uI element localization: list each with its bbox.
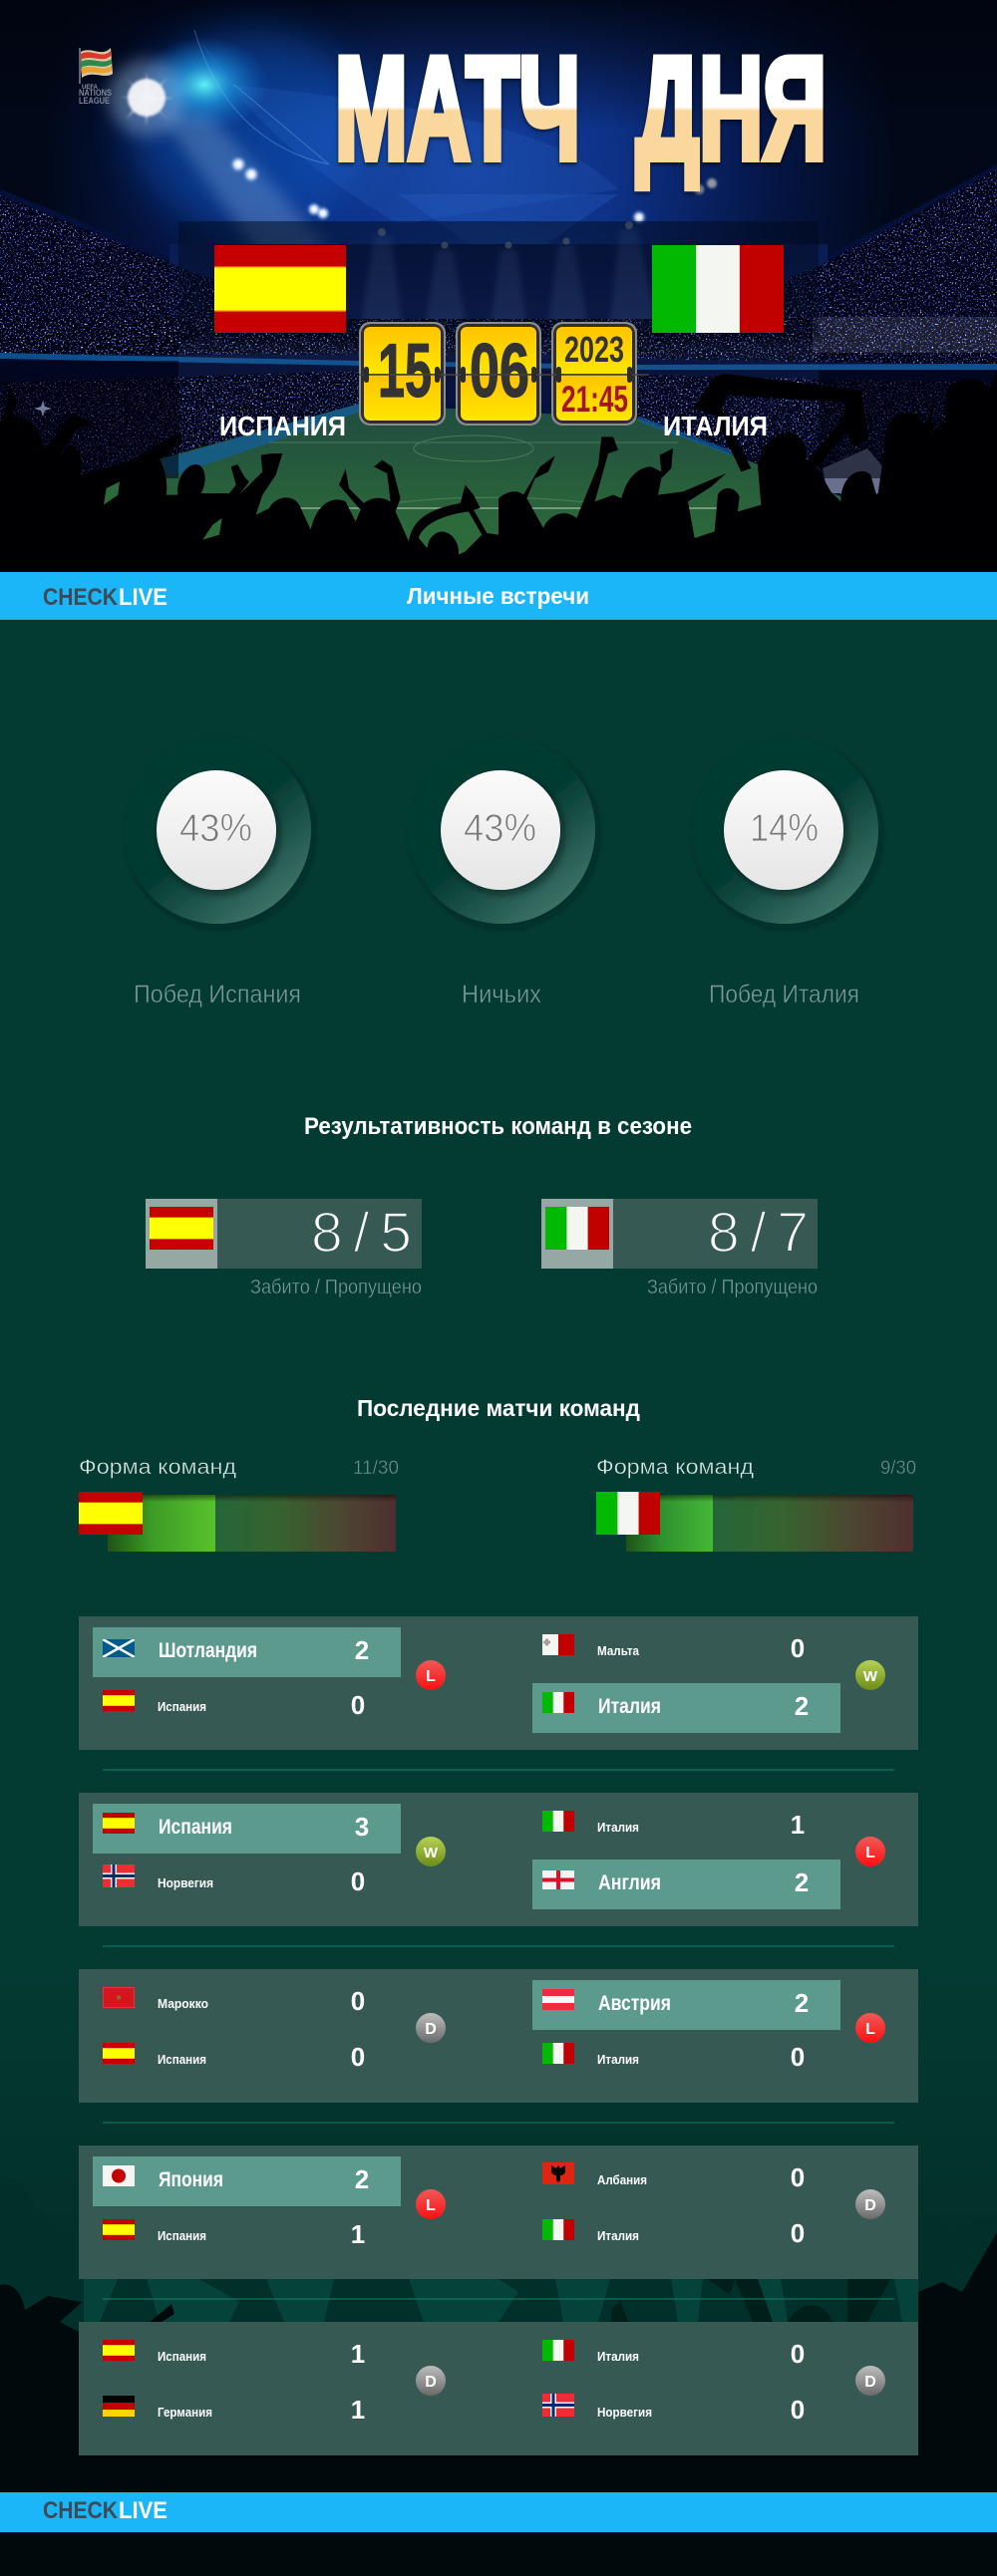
flip clock: date and time bbox=[359, 322, 649, 426]
badge: L: L bbox=[426, 2197, 436, 2214]
badge: D bbox=[855, 2189, 885, 2219]
Германия 1: 1 bbox=[351, 2395, 365, 2425]
team form: Испания bbox=[79, 1456, 399, 1552]
goals card: Италия bbox=[541, 1199, 818, 1298]
card: month bbox=[456, 322, 541, 426]
Италия 2: Италия bbox=[598, 1695, 661, 1718]
heading: Последние матчи команд: Последние матчи команд bbox=[357, 1395, 640, 1421]
Испания 0 bbox=[103, 1690, 365, 1720]
hero translucent match panel bbox=[178, 221, 819, 478]
crowd silhouette: right bbox=[498, 371, 997, 572]
Испания 0 bbox=[103, 2042, 365, 2072]
panel: матч 5 bbox=[79, 2322, 918, 2455]
brand: CheckLive: CHECK bbox=[43, 2497, 119, 2524]
Норвегия 0: Норвегия bbox=[158, 1875, 213, 1890]
badge: L: L bbox=[865, 1845, 875, 1861]
badge: W bbox=[855, 1660, 885, 1690]
Италия 0 bbox=[542, 2042, 805, 2072]
badge: W: W bbox=[863, 1668, 878, 1685]
raised scarf bbox=[693, 374, 869, 475]
Италия 1: 1 bbox=[791, 1810, 805, 1840]
card: day bbox=[359, 322, 446, 426]
Испания 1: 1 bbox=[351, 2219, 365, 2249]
Марокко 0: Марокко bbox=[158, 1996, 208, 2011]
title: Матч дня: МАТЧ bbox=[335, 27, 580, 189]
Норвегия 0 bbox=[542, 2394, 805, 2425]
card: day: 15 bbox=[378, 329, 432, 414]
Испания 1: 1 bbox=[351, 2339, 365, 2369]
stat: Ничьих bbox=[408, 736, 595, 1008]
stat: Побед Италия: 14% bbox=[750, 807, 819, 850]
crowd watermark: back layer at page bottom bbox=[0, 2177, 997, 2491]
title: Матч дня: ДНЯ bbox=[636, 27, 827, 189]
badge: D: D bbox=[864, 2197, 876, 2214]
flag: Италия (hero) bbox=[652, 245, 784, 333]
Италия 2: 2 bbox=[795, 1691, 809, 1721]
panel: матч 3 bbox=[79, 1969, 918, 2103]
heading: Результативность команд в сезоне: Результативность команд в сезоне bbox=[304, 1113, 692, 1140]
section heading: Личные встречи: Личные встречи bbox=[407, 583, 589, 609]
team form: Италия bbox=[596, 1456, 916, 1552]
Италия 0 bbox=[542, 2339, 805, 2369]
Испания 1 bbox=[103, 2339, 365, 2369]
Мальта 0: 0 bbox=[791, 1633, 805, 1663]
Италия 0: Италия bbox=[597, 2228, 639, 2243]
Англия 2: Англия bbox=[598, 1871, 661, 1894]
team form: Италия: 9/30 bbox=[880, 1458, 916, 1479]
Италия 0: 0 bbox=[791, 2339, 805, 2369]
Норвегия 0: 0 bbox=[791, 2395, 805, 2425]
bottom blue bar bbox=[0, 2492, 997, 2532]
Испания 3: Испания bbox=[159, 1816, 232, 1839]
bottom blue bar: LIVE bbox=[119, 2497, 167, 2524]
card: year and kick-off time bbox=[551, 322, 637, 426]
team form: Испания: Форма команд bbox=[79, 1456, 236, 1479]
badge: L bbox=[416, 1660, 446, 1690]
flag: Испания (hero) bbox=[214, 245, 346, 333]
badge: D bbox=[855, 2366, 885, 2396]
Шотландия 2: Шотландия bbox=[159, 1639, 257, 1662]
Италия 0: 0 bbox=[791, 2218, 805, 2248]
stat: Побед Испания: Побед Испания bbox=[134, 981, 301, 1008]
hero: stadium scene bbox=[0, 0, 997, 572]
badge: L: L bbox=[426, 1668, 436, 1685]
crowd silhouette: left bbox=[0, 384, 498, 572]
stat: Побед Испания: 43% bbox=[179, 807, 252, 850]
Италия 0: 0 bbox=[791, 2042, 805, 2072]
badge: L: L bbox=[865, 2021, 875, 2038]
team name: Италия: ИТАЛИЯ bbox=[663, 411, 768, 441]
Албания 0: 0 bbox=[791, 2162, 805, 2192]
panel: матч 1 bbox=[79, 1616, 918, 1750]
Испания 3: 3 bbox=[355, 1812, 369, 1842]
Норвегия 0: 0 bbox=[351, 1866, 365, 1896]
Англия 2 bbox=[532, 1860, 840, 1909]
panel: матч 2 bbox=[79, 1793, 918, 1926]
brand: CheckLive: CHECK bbox=[43, 584, 119, 611]
stat: Ничьих: 43% bbox=[464, 807, 536, 850]
team form: Италия: Форма команд bbox=[596, 1456, 754, 1479]
Албания 0: Албания bbox=[597, 2172, 647, 2187]
Италия 1: Италия bbox=[597, 1820, 639, 1835]
Шотландия 2: 2 bbox=[355, 1635, 369, 1665]
stat: Ничьих: Ничьих bbox=[462, 981, 541, 1008]
team form: Испания: 11/30 bbox=[353, 1458, 399, 1479]
badge: D bbox=[416, 2013, 446, 2043]
logo: UEFA Nations League bbox=[79, 48, 113, 106]
Мальта 0: Мальта bbox=[597, 1643, 640, 1658]
team name: Испания: ИСПАНИЯ bbox=[219, 411, 346, 441]
Испания 3 bbox=[93, 1804, 401, 1854]
top blue bar bbox=[0, 572, 997, 620]
badge: D: D bbox=[425, 2374, 437, 2391]
Марокко 0: 0 bbox=[351, 1986, 365, 2016]
Австрия 2: Австрия bbox=[598, 1992, 671, 2015]
match panels bbox=[79, 1616, 918, 2455]
Мальта 0 bbox=[542, 1633, 805, 1663]
Испания 1: Испания bbox=[158, 2228, 206, 2243]
badge: L bbox=[416, 2189, 446, 2219]
Италия 0 bbox=[542, 2218, 805, 2248]
card: month: 06 bbox=[470, 329, 529, 414]
stat: Побед Испания bbox=[124, 736, 311, 1008]
card: year and kick-off time: 21:45 bbox=[561, 379, 628, 420]
Германия 1: Германия bbox=[158, 2405, 212, 2420]
goals card: Испания: Забито / Пропущено bbox=[250, 1277, 422, 1298]
Испания 1 bbox=[103, 2219, 365, 2249]
goals card: Испания bbox=[146, 1199, 422, 1298]
Норвегия 0 bbox=[103, 1864, 365, 1896]
Австрия 2 bbox=[532, 1980, 840, 2030]
Япония 2 bbox=[93, 2156, 401, 2206]
Норвегия 0: Норвегия bbox=[597, 2405, 652, 2420]
badge: W: W bbox=[424, 1845, 439, 1861]
goals card: Италия: Забито / Пропущено bbox=[647, 1277, 818, 1298]
Япония 2: 2 bbox=[355, 2164, 369, 2194]
Марокко 0 bbox=[103, 1986, 365, 2016]
badge: L bbox=[855, 2013, 885, 2043]
Испания 0: Испания bbox=[158, 1699, 206, 1714]
Шотландия 2 bbox=[93, 1627, 401, 1677]
stat: Побед Италия: Побед Италия bbox=[709, 981, 859, 1008]
Япония 2: Япония bbox=[159, 2168, 223, 2191]
logo: UEFA Nations League: LEAGUE bbox=[79, 96, 110, 106]
goals card: Испания: 8 / 5 bbox=[311, 1201, 412, 1265]
Англия 2: 2 bbox=[795, 1867, 809, 1897]
Испания 0: 0 bbox=[351, 1690, 365, 1720]
badge: D: D bbox=[425, 2021, 437, 2038]
hero floodlights bbox=[34, 60, 717, 417]
top blue bar: LIVE bbox=[119, 584, 167, 611]
logo: UEFA Nations League: NATIONS bbox=[79, 88, 112, 98]
badge: L bbox=[855, 1837, 885, 1866]
goals card: Италия: 8 / 7 bbox=[708, 1201, 809, 1265]
Испания 1: Испания bbox=[158, 2349, 206, 2364]
Италия 0: Италия bbox=[597, 2349, 639, 2364]
Италия 1 bbox=[542, 1810, 805, 1840]
Испания 0: 0 bbox=[351, 2042, 365, 2072]
logo: UEFA Nations League: UEFA bbox=[82, 85, 99, 91]
Испания 0: Испания bbox=[158, 2052, 206, 2067]
crowd watermark: foreground layer at page bottom bbox=[0, 2232, 997, 2576]
card: year and kick-off time: 2023 bbox=[564, 329, 624, 370]
stat: Побед Италия bbox=[691, 736, 878, 1008]
darker side areas below the ribbon bbox=[0, 361, 997, 478]
Германия 1 bbox=[103, 2395, 365, 2425]
Австрия 2: 2 bbox=[795, 1988, 809, 2018]
badge: W bbox=[416, 1837, 446, 1866]
Италия 0: Италия bbox=[597, 2052, 639, 2067]
Албания 0 bbox=[542, 2162, 805, 2192]
Италия 2 bbox=[532, 1683, 840, 1733]
badge: D bbox=[416, 2366, 446, 2396]
badge: D: D bbox=[864, 2374, 876, 2391]
panel: матч 4 bbox=[79, 2146, 918, 2279]
